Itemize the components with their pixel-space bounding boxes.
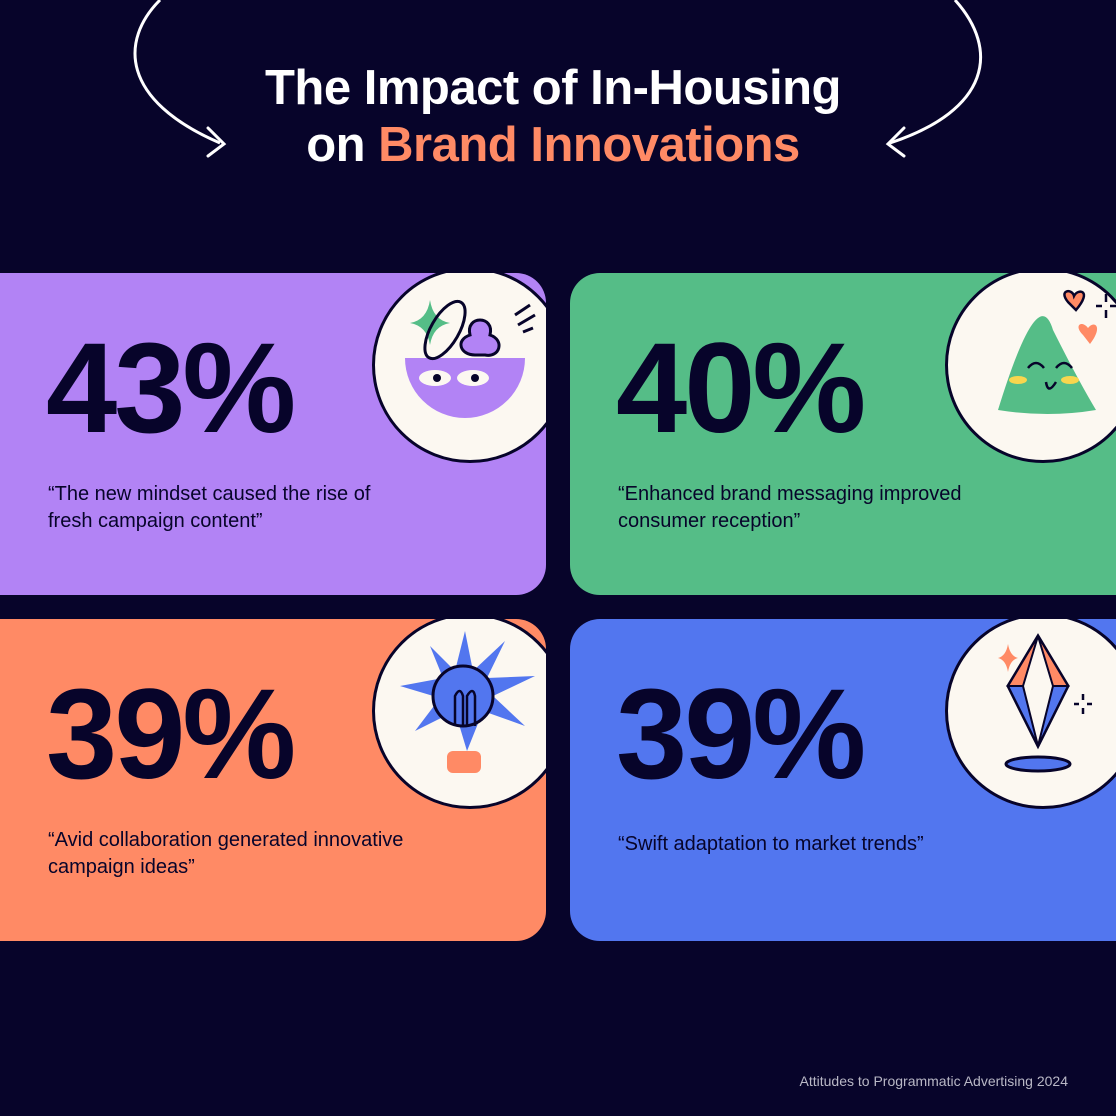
- panel: 43%: [0, 273, 546, 595]
- panel: 39% adaptation: 39%: [616, 663, 863, 806]
- icon: lightbulb: [372, 613, 568, 809]
- panel: 40%: [570, 273, 1116, 595]
- panel: 39% adaptation: [570, 619, 1116, 941]
- panel: 40%: consumer reception”: [618, 510, 800, 532]
- title: The Impact of In-Housing: [265, 61, 841, 115]
- title: [265, 61, 841, 172]
- footer source: Attitudes to Programmatic Advertising 2024: [800, 1073, 1068, 1089]
- panel: 39% adaptation: “Swift adaptation to market trends”: [618, 833, 924, 855]
- panel: 40%: 40%: [616, 317, 863, 460]
- panel: 39% collaboration: [0, 619, 546, 941]
- panel: 40%: “Enhanced brand messaging improved: [618, 483, 962, 505]
- panel: 43%: 43%: [46, 317, 293, 460]
- icon: head: [372, 267, 568, 463]
- panel: 39% collaboration: 39%: [46, 663, 293, 806]
- title: on Brand Innovations: [306, 118, 800, 172]
- icon: smiling triangle: [945, 267, 1116, 463]
- panel: 39% collaboration: campaign ideas”: [48, 856, 195, 878]
- panel: 43%: “The new mindset caused the rise of: [48, 483, 370, 505]
- arrows: [134, 0, 982, 158]
- icon: diamond: [945, 613, 1116, 809]
- panel: 39% collaboration: “Avid collaboration generated innovative: [48, 829, 403, 851]
- panel: 43%: fresh campaign content”: [48, 510, 263, 532]
